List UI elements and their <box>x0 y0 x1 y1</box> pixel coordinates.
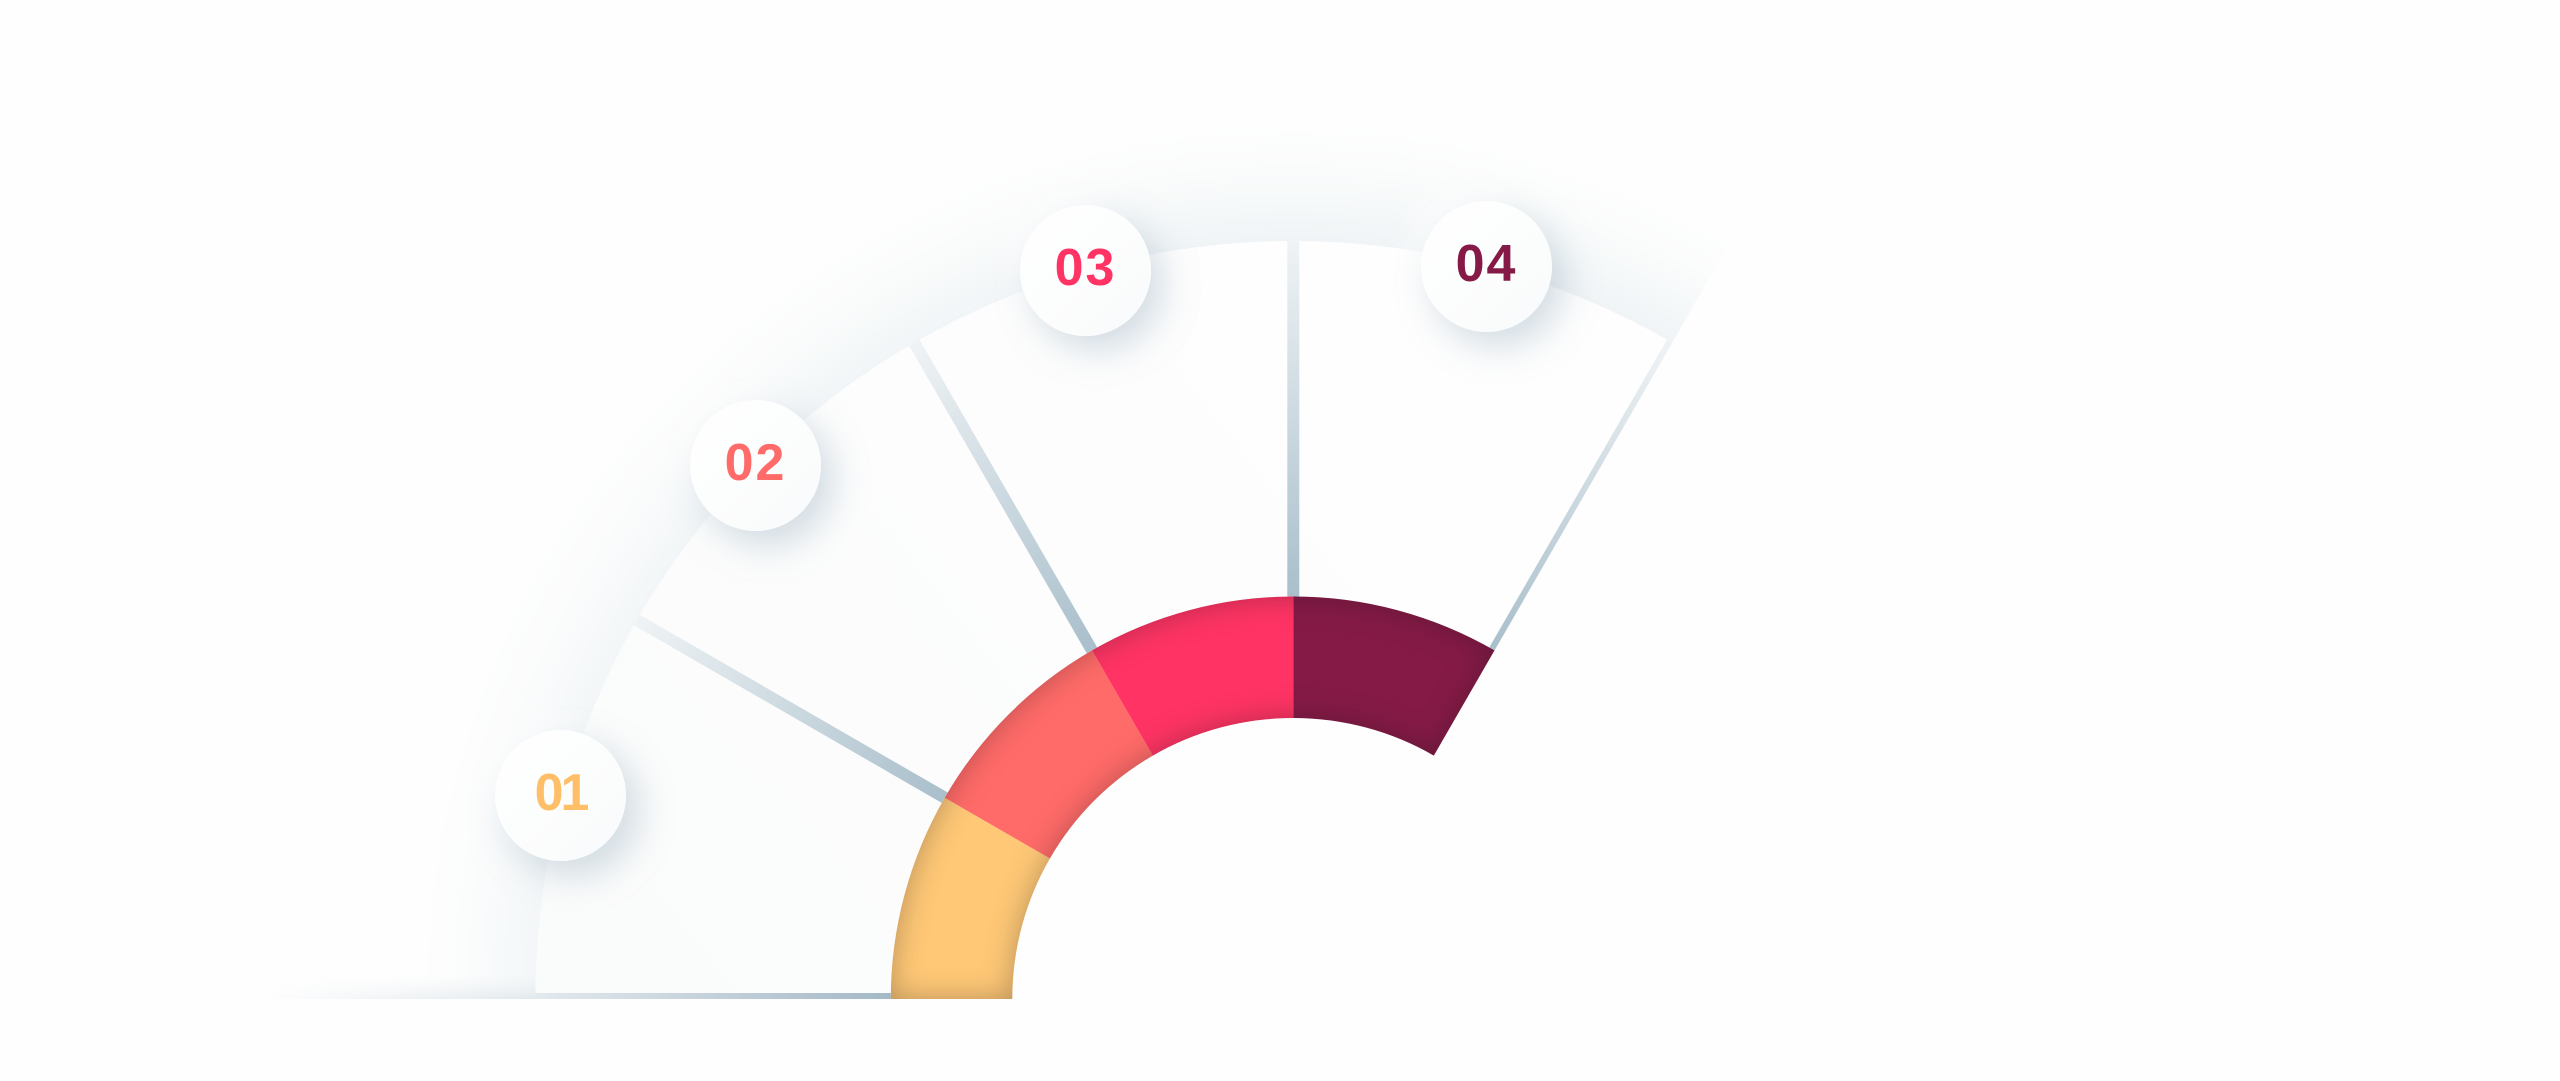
badge 03: 03 <box>1055 239 1116 297</box>
badge 01: 01 <box>535 764 586 822</box>
divider lines <box>535 241 1672 999</box>
ring segment 04: maroon <box>1293 596 1494 756</box>
ring segment 02: coral <box>945 650 1153 858</box>
badge 04: 04 <box>1456 235 1517 293</box>
badge 01 <box>495 730 626 861</box>
badge 04 <box>1421 201 1552 332</box>
outer glow band <box>346 200 1692 999</box>
panel: four segment backdrop <box>535 241 1672 999</box>
baseline shadow <box>346 988 535 999</box>
ring segment 03: pink <box>1092 596 1293 756</box>
ring segment 01: yellow <box>891 798 1050 999</box>
badge 02: 02 <box>725 434 786 492</box>
badge 02 <box>690 400 821 531</box>
badge 03 <box>1020 205 1151 336</box>
colored ring <box>891 596 1494 999</box>
